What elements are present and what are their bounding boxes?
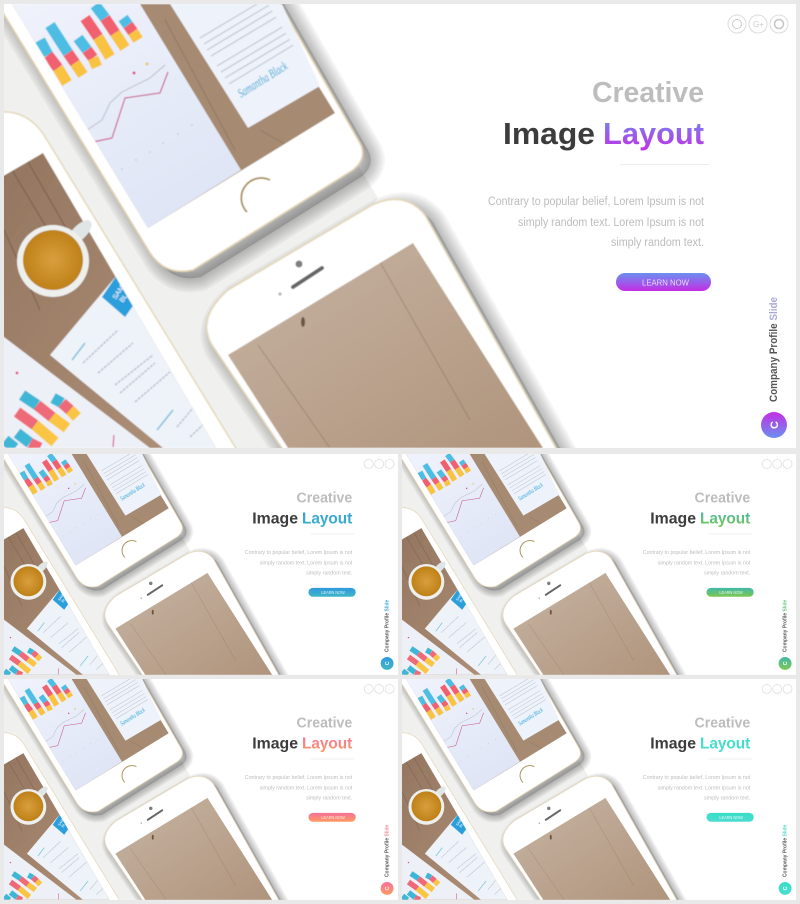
title: Image — [650, 511, 696, 528]
title — [650, 491, 750, 528]
body text: Contrary to popular belief, Lorem Ipsum is not — [643, 775, 751, 781]
logo badge — [779, 657, 792, 670]
logo badge — [381, 657, 394, 670]
logo badge: C — [385, 661, 391, 665]
divider — [620, 164, 709, 165]
title: Layout — [700, 736, 750, 753]
body text: simply random text. — [306, 570, 353, 576]
divider — [708, 533, 753, 535]
slide panel — [4, 454, 398, 675]
logo badge — [761, 412, 787, 438]
body text: simply random text. — [704, 795, 751, 801]
title: Creative — [695, 716, 750, 732]
slide panel — [4, 4, 796, 448]
social icons — [762, 684, 792, 693]
social icons — [762, 459, 792, 468]
title: Layout — [700, 511, 750, 528]
slide panel — [402, 679, 796, 900]
social icons — [364, 684, 394, 693]
body text: simply random text. Lorem Ipsum is not — [658, 560, 751, 566]
thumbnail slide: green — [400, 450, 796, 684]
button: LEARN NOW — [719, 815, 743, 820]
body text: simply random text. — [306, 795, 353, 801]
body text: simply random text. Lorem Ipsum is not — [518, 217, 705, 229]
social icons — [364, 459, 394, 468]
button — [706, 813, 754, 822]
logo badge: C — [783, 886, 789, 890]
button — [308, 813, 356, 822]
title — [650, 716, 750, 753]
divider — [708, 758, 753, 760]
body text: simply random text. — [611, 237, 704, 249]
button: LEARN NOW — [321, 590, 345, 595]
phones photo — [2, 675, 285, 904]
title: Image — [650, 736, 696, 753]
button — [308, 588, 356, 597]
title: Creative — [592, 77, 704, 109]
body text — [245, 775, 353, 801]
slide panel — [402, 454, 796, 675]
main slide: purple — [0, 0, 796, 467]
thumbnail slide: turquoise — [400, 675, 796, 904]
button: LEARN NOW — [321, 815, 345, 820]
title: Creative — [695, 491, 750, 507]
body text: Contrary to popular belief, Lorem Ipsum is not — [245, 775, 353, 781]
title — [503, 77, 704, 151]
title: Image — [503, 116, 595, 151]
body text: simply random text. — [704, 570, 751, 576]
body text — [643, 550, 751, 576]
button — [616, 273, 711, 291]
body text — [488, 196, 705, 249]
phones photo — [0, 0, 568, 467]
body text: Contrary to popular belief, Lorem Ipsum is not — [488, 196, 705, 208]
slide panel — [4, 679, 398, 900]
body text — [245, 550, 353, 576]
button: LEARN NOW — [719, 590, 743, 595]
phones photo — [400, 450, 683, 684]
body text: simply random text. Lorem Ipsum is not — [260, 785, 353, 791]
button — [706, 588, 754, 597]
side label: Company Profile Slide — [783, 600, 789, 652]
divider — [310, 758, 355, 760]
side label: Company Profile Slide — [768, 297, 780, 402]
thumbnail slide: coral — [2, 675, 398, 904]
title: Layout — [603, 116, 704, 151]
side label: Company Profile Slide — [385, 600, 391, 652]
logo badge — [381, 882, 394, 895]
social icons — [728, 15, 788, 33]
side label: Company Profile Slide — [783, 825, 789, 877]
body text: simply random text. Lorem Ipsum is not — [260, 560, 353, 566]
logo badge: C — [385, 886, 391, 890]
body text — [643, 775, 751, 801]
phones photo — [2, 450, 285, 684]
title — [252, 491, 352, 528]
logo badge: C — [783, 661, 789, 665]
social icons: G+ — [753, 20, 764, 29]
title: Image — [252, 511, 298, 528]
title: Layout — [302, 511, 352, 528]
phones photo — [400, 675, 683, 904]
body text: Contrary to popular belief, Lorem Ipsum is not — [245, 550, 353, 556]
body text: simply random text. Lorem Ipsum is not — [658, 785, 751, 791]
title: Image — [252, 736, 298, 753]
body text: Contrary to popular belief, Lorem Ipsum is not — [643, 550, 751, 556]
button: LEARN NOW — [642, 278, 689, 288]
title — [252, 716, 352, 753]
logo badge — [779, 882, 792, 895]
divider — [310, 533, 355, 535]
title: Creative — [297, 716, 352, 732]
side label: Company Profile Slide — [385, 825, 391, 877]
thumbnail slide: blue — [2, 450, 398, 684]
logo badge: C — [769, 421, 781, 429]
title: Layout — [302, 736, 352, 753]
title: Creative — [297, 491, 352, 507]
